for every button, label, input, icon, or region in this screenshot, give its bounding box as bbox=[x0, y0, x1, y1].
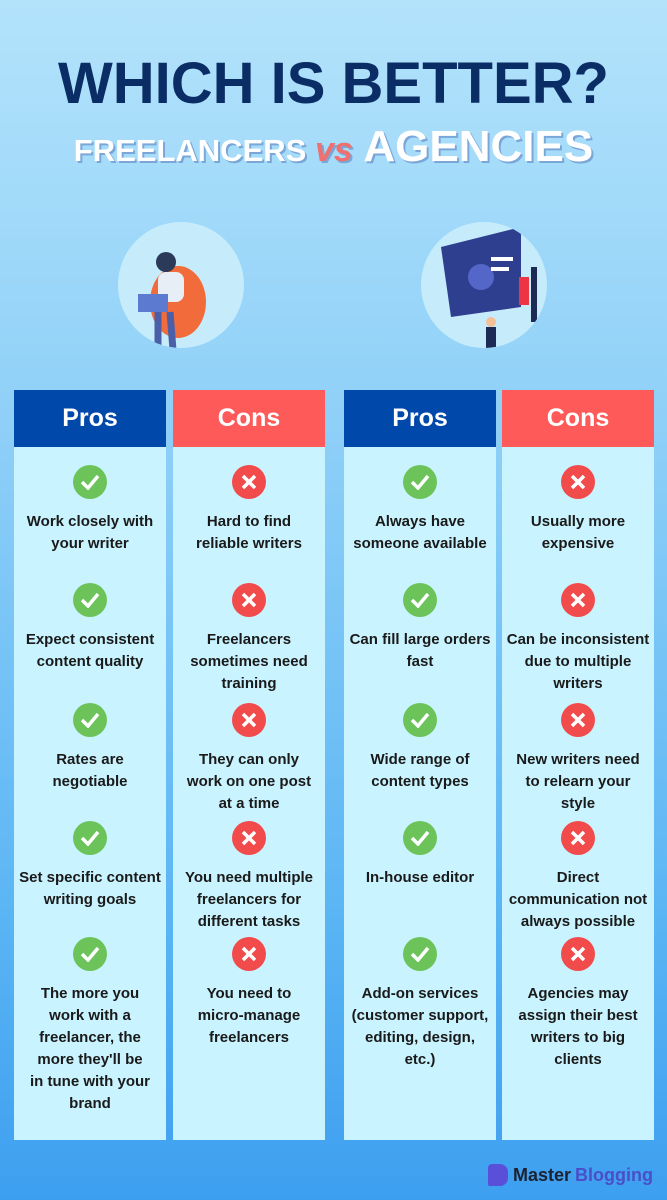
panel: freelancer pros: Set specific content bbox=[19, 869, 161, 886]
header: pros: Pros bbox=[62, 404, 118, 432]
panel: freelancer cons: sometimes need bbox=[190, 653, 308, 670]
logo: Master Blogging: Blogging bbox=[575, 1164, 653, 1184]
panel: freelancer cons: You need to bbox=[207, 985, 291, 1002]
panel: agency pros: Can fill large orders bbox=[350, 631, 490, 648]
panel: agency cons: Usually more bbox=[531, 513, 625, 530]
title: WHICH IS BETTER? bbox=[58, 51, 609, 116]
panel: agency cons: style bbox=[561, 795, 595, 812]
header: cons bbox=[173, 390, 325, 447]
panel: agency pros bbox=[344, 390, 496, 1140]
panel: agency cons: always possible bbox=[521, 913, 635, 930]
header: cons bbox=[502, 390, 654, 447]
illustration: agency bbox=[421, 222, 547, 348]
panel: agency pros: fast bbox=[407, 653, 433, 670]
panel: agency cons: clients bbox=[554, 1051, 602, 1068]
panel: agency pros: (customer support, bbox=[352, 1007, 488, 1024]
panel: agency pros: editing, design, bbox=[365, 1029, 475, 1046]
panel: agency cons bbox=[502, 390, 654, 1140]
panel: freelancer cons: reliable writers bbox=[196, 535, 302, 552]
subtitle: FREELANCERS vs AGENCIES bbox=[74, 122, 593, 171]
header: pros bbox=[14, 390, 166, 447]
panel: freelancer pros: work with a bbox=[49, 1007, 131, 1024]
panel: agency cons: due to multiple bbox=[525, 653, 631, 670]
panel: agency pros: Add-on services bbox=[362, 985, 478, 1002]
panel: agency pros: content types bbox=[371, 773, 469, 790]
panel: freelancer pros: in tune with your bbox=[30, 1073, 150, 1090]
panel: freelancer pros: The more you bbox=[41, 985, 139, 1002]
panel: freelancer pros: writing goals bbox=[44, 891, 136, 908]
panel: freelancer cons: at a time bbox=[219, 795, 279, 812]
panel: freelancer cons: micro-manage bbox=[198, 1007, 300, 1024]
panel: freelancer pros: Rates are bbox=[56, 751, 124, 768]
panel: freelancer cons: Freelancers bbox=[207, 631, 291, 648]
header: cons: Cons bbox=[547, 404, 609, 432]
panel: agency pros: Wide range of bbox=[370, 751, 470, 768]
panel: freelancer pros: freelancer, the bbox=[39, 1029, 141, 1046]
panel: freelancer cons: You need multiple bbox=[185, 869, 313, 886]
panel: freelancer pros: Work closely with bbox=[27, 513, 153, 530]
logo: Master Blogging: Master bbox=[513, 1164, 571, 1184]
panel: freelancer pros: brand bbox=[69, 1095, 111, 1112]
panel: agency cons: New writers need bbox=[516, 751, 640, 768]
panel: agency cons: communication not bbox=[509, 891, 647, 908]
panel: freelancer cons bbox=[173, 390, 325, 1140]
panel: agency pros: Always have bbox=[375, 513, 465, 530]
panel: agency pros: someone available bbox=[353, 535, 487, 552]
panel: agency cons: writers bbox=[553, 675, 603, 692]
panel: agency cons: Agencies may bbox=[528, 985, 628, 1002]
panel: freelancer cons: freelancers for bbox=[197, 891, 301, 908]
panel: freelancer cons: They can only bbox=[199, 751, 299, 768]
panel: freelancer pros: your writer bbox=[51, 535, 129, 552]
panel: agency cons: assign their best bbox=[518, 1007, 638, 1024]
panel: agency cons: to relearn your bbox=[525, 773, 631, 790]
panel: agency cons: Can be inconsistent bbox=[507, 631, 649, 648]
panel: freelancer cons: freelancers bbox=[209, 1029, 289, 1046]
panel: freelancer pros: more they'll be bbox=[37, 1051, 143, 1068]
panel: freelancer pros bbox=[14, 390, 166, 1140]
panel: freelancer cons: training bbox=[222, 675, 276, 692]
header: pros bbox=[344, 390, 496, 447]
panel: freelancer pros: negotiable bbox=[52, 773, 128, 790]
logo: Master Blogging bbox=[488, 1164, 653, 1186]
panel: freelancer pros: content quality bbox=[37, 653, 143, 670]
panel: agency pros: etc.) bbox=[405, 1051, 435, 1068]
panel: agency pros: In-house editor bbox=[366, 869, 474, 886]
illustration: freelancer bbox=[118, 222, 244, 348]
panel: agency cons: Direct bbox=[557, 869, 599, 886]
panel: freelancer cons: Hard to find bbox=[207, 513, 291, 530]
panel: agency cons: writers to big bbox=[531, 1029, 625, 1046]
header: pros: Pros bbox=[392, 404, 448, 432]
panel: freelancer cons: work on one post bbox=[187, 773, 311, 790]
panel: freelancer cons: different tasks bbox=[198, 913, 300, 930]
panel: agency cons: expensive bbox=[542, 535, 614, 552]
header: cons: Cons bbox=[218, 404, 280, 432]
panel: freelancer pros: Expect consistent bbox=[26, 631, 154, 648]
